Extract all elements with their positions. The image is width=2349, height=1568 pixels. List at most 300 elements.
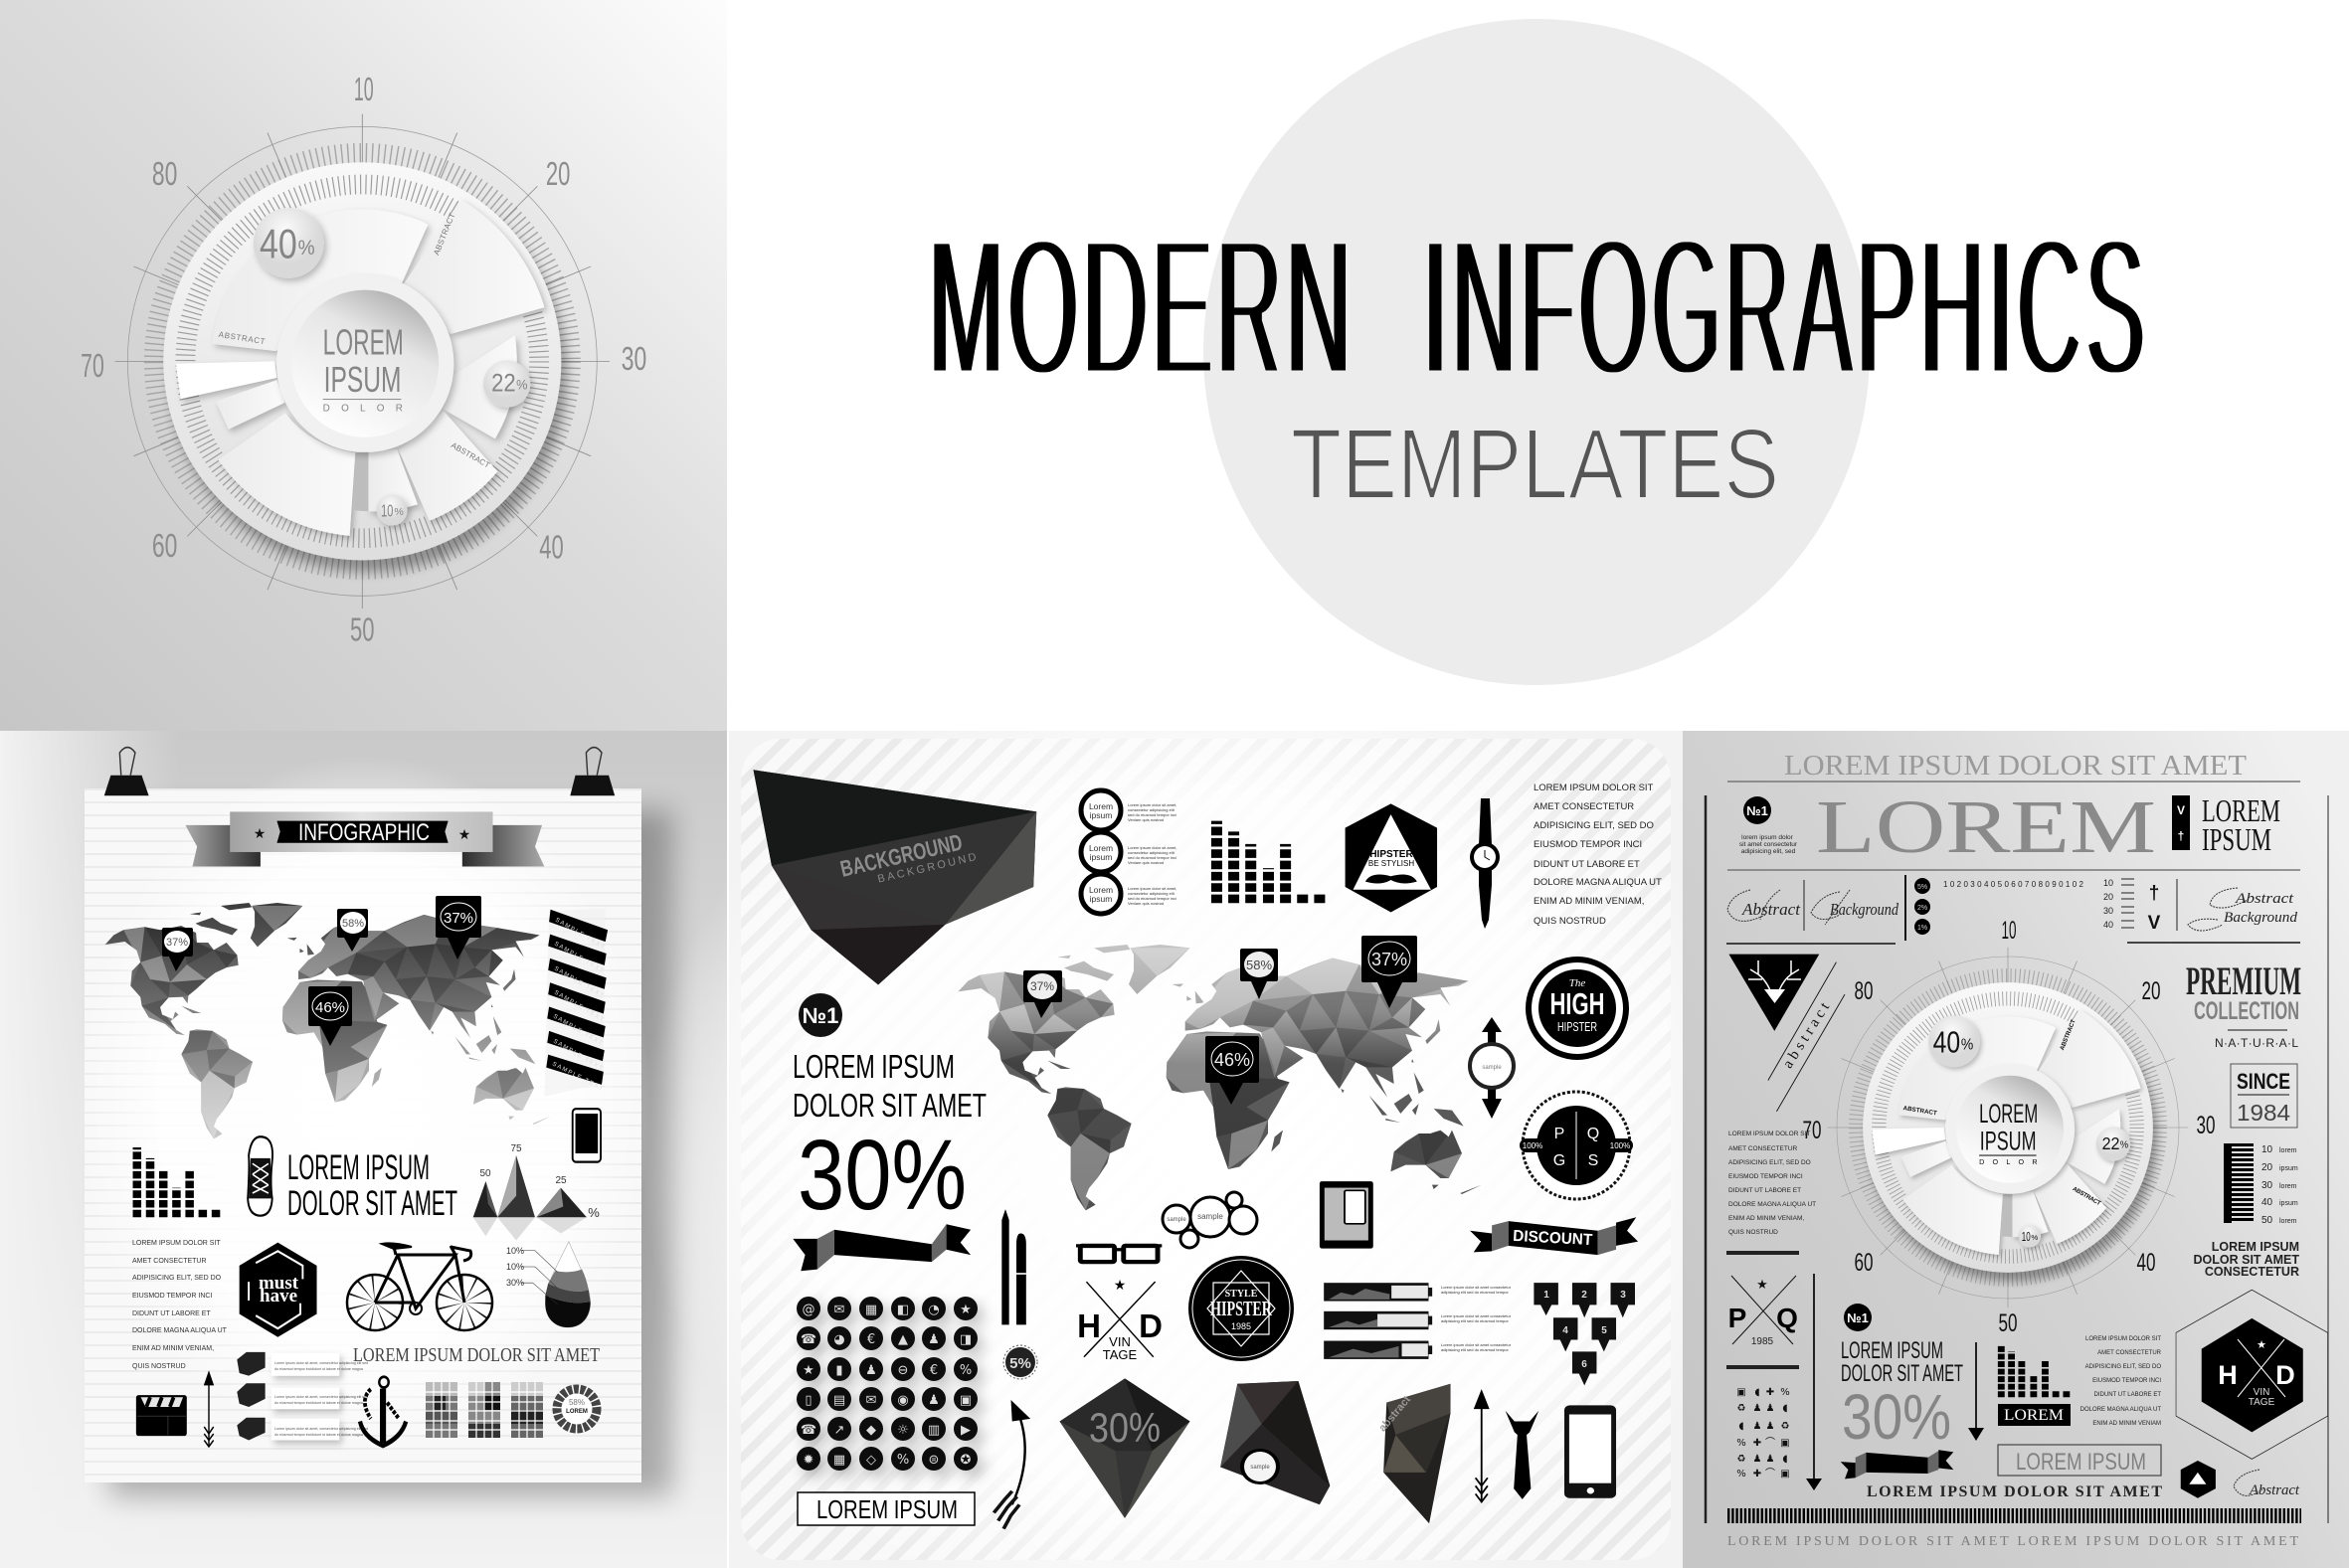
icon grid: ◉ xyxy=(897,1393,909,1408)
icon grid: ✉ xyxy=(834,1303,844,1317)
badge: PQGS: Q xyxy=(1587,1126,1599,1142)
premium collection: N·A·T·U·R·A·L xyxy=(2215,1036,2298,1050)
ribbon list: SAMPLE TEXT xyxy=(553,966,606,1000)
subheading: templates: TEMPLATES xyxy=(1291,409,1779,520)
dial scale numbers xyxy=(1802,917,2216,1337)
dial scale numbers: 70 xyxy=(1802,1117,1822,1144)
dial percentages: % xyxy=(298,235,315,260)
small icon grid: ✚ xyxy=(1753,1469,1761,1480)
dial percentages: % xyxy=(2120,1140,2128,1151)
logo: HD vintage: VIN xyxy=(1109,1334,1131,1349)
dial centre label xyxy=(1979,1099,2038,1166)
numbered pins: 2 xyxy=(1581,1290,1587,1301)
headline lorem ipsum: DOLOR SIT AMET xyxy=(287,1184,457,1223)
dial scale numbers: 60 xyxy=(152,527,177,564)
hexagon logo: HD vintage xyxy=(2176,1290,2328,1459)
icon grid: ▥ xyxy=(928,1423,940,1438)
ribbon: infographic xyxy=(185,811,544,867)
right aligned list: LOREM IPSUM DOLOR SIT xyxy=(2085,1336,2161,1342)
circle list: ipsum xyxy=(1090,894,1112,904)
circle list: Lorem ipsum dolor sit amet, xyxy=(1128,845,1176,850)
poster shadow xyxy=(109,810,672,1496)
badge: the high hipster: The xyxy=(1569,977,1585,989)
black tag with marks xyxy=(2172,795,2190,850)
dial percentages: % xyxy=(2031,1233,2039,1242)
icon grid: ✹ xyxy=(804,1453,814,1468)
bar chart xyxy=(2001,1345,2067,1397)
triangle chart: 75 xyxy=(510,1143,522,1154)
barcode legend xyxy=(2224,1143,2298,1226)
double arrow with dial xyxy=(1470,1017,1514,1119)
panel background xyxy=(729,731,1683,1568)
bubble cluster: sample xyxy=(1197,1212,1223,1221)
bar chart xyxy=(1216,821,1320,903)
small icon grid xyxy=(1736,1387,1790,1480)
dial abstract labels: ABSTRACT xyxy=(1902,1105,1937,1118)
label: lorem black xyxy=(1998,1404,2071,1426)
text list: ADIPISICING ELIT, SED DO xyxy=(1534,820,1654,831)
icon grid: ◔ xyxy=(928,1303,940,1317)
small icon grid: ▣ xyxy=(1780,1469,1790,1480)
speech tag list: do eiusmod tempor incididunt ut labore et dolore magna xyxy=(274,1401,363,1405)
icon grid: ◨ xyxy=(960,1332,972,1347)
marks: V xyxy=(2148,913,2161,934)
polygon banner: background xyxy=(754,770,1036,984)
circle list: Lorem xyxy=(1089,843,1113,853)
dial centre label: IPSUM xyxy=(324,359,401,400)
tablet icon xyxy=(1320,1181,1373,1249)
dial percentages xyxy=(260,221,528,521)
text list: QUIS NOSTRUD xyxy=(1728,1229,1778,1236)
icon grid: ★ xyxy=(803,1363,814,1378)
hexagon logo: HD vintage: TAGE xyxy=(2249,1397,2275,1408)
icon grid: % xyxy=(897,1453,909,1468)
ring gauge: 58% xyxy=(569,1398,585,1407)
icon grid: ♟ xyxy=(865,1363,877,1378)
logo: PQ 1985 xyxy=(1728,1276,1798,1347)
dial abstract labels: ABSTRACT xyxy=(2072,1185,2102,1207)
text list: ADIPISICING ELIT, SED DO xyxy=(1728,1159,1811,1166)
label box: lorem ipsum: LOREM IPSUM xyxy=(2016,1449,2146,1476)
circle list: sed do eiusmod tempor inci xyxy=(1128,896,1176,901)
text list: AMET CONSECTETUR xyxy=(132,1258,207,1265)
tick scale xyxy=(2103,878,2134,930)
pin 58 percent: 58% xyxy=(1246,958,1272,972)
barcode legend: lorem xyxy=(2279,1218,2297,1225)
gem: abstract xyxy=(1376,1384,1451,1523)
arrow icon xyxy=(1474,1389,1490,1502)
five percent circle xyxy=(1003,1345,1037,1379)
text list: AMET CONSECTETUR xyxy=(1534,801,1634,812)
poster centre glow xyxy=(75,756,651,1452)
text list xyxy=(1534,783,1662,927)
script: abstract background: Background xyxy=(1830,900,1898,919)
black tag with marks: V xyxy=(2177,803,2185,817)
curved arrow xyxy=(994,1400,1030,1529)
dial percentages: 22 xyxy=(2102,1133,2120,1153)
small icon grid: ♻ xyxy=(1737,1454,1746,1465)
heading: modern infographics: MODERN xyxy=(929,199,1355,416)
right aligned list xyxy=(2080,1336,2162,1427)
discount ribbon: DISCOUNT xyxy=(1513,1228,1593,1249)
dial percentages: 40 xyxy=(260,221,297,267)
text list: ADIPISICING ELIT, SED DO xyxy=(132,1275,222,1282)
ring gauge xyxy=(557,1389,597,1429)
dial scale numbers: 20 xyxy=(546,155,570,192)
text list: LOREM IPSUM DOLOR SIT xyxy=(1534,783,1654,793)
number one with blurb: №1 xyxy=(1746,803,1768,818)
small icon grid: ▣ xyxy=(1780,1438,1790,1449)
black ribbon xyxy=(1841,1450,1953,1479)
percent dots xyxy=(1914,878,1930,935)
icon grid: ▶ xyxy=(961,1423,971,1438)
circle list: Lorem ipsum dolor sit amet, xyxy=(1128,886,1176,891)
text list xyxy=(1728,1131,1816,1236)
bicycle icon xyxy=(347,1243,492,1330)
dial scale numbers: 40 xyxy=(2136,1249,2156,1277)
script: abstract background: Abstract xyxy=(1741,900,1801,919)
badge: must have xyxy=(240,1243,317,1337)
polygon banner: background: BACKGROUND xyxy=(837,828,965,882)
dial percentages xyxy=(1933,1026,2128,1244)
panel: title xyxy=(929,19,2149,685)
speech tag list xyxy=(237,1352,368,1440)
dial scale numbers: 80 xyxy=(1854,977,1874,1005)
text list: AMET CONSECTETUR xyxy=(1728,1145,1798,1152)
right aligned list: EIUSMOD TEMPOR INCI xyxy=(2092,1378,2161,1384)
circle list: sed do eiusmod tempor inci xyxy=(1128,855,1176,860)
dial centre label: LOREM xyxy=(1979,1099,2038,1129)
text list: LOREM IPSUM DOLOR SIT xyxy=(1728,1131,1810,1137)
dial abstract labels: ABSTRACT xyxy=(450,440,491,470)
map pins xyxy=(1023,936,1417,1105)
barcode legend: 20 xyxy=(2261,1162,2273,1173)
pin 37 percent: 37% xyxy=(166,937,188,949)
icon grid: % xyxy=(960,1363,972,1378)
rotated abstract label xyxy=(1768,962,1845,1112)
script: abstract: Abstract xyxy=(2249,1482,2300,1498)
tick scale: 10 xyxy=(2103,878,2113,888)
ribbon list: SAMPLE TEXT xyxy=(553,942,606,975)
pin 37 percent: 37% xyxy=(1030,979,1054,993)
badge: PQGS: 100% xyxy=(1523,1141,1542,1150)
black ribbon xyxy=(793,1224,971,1271)
sheet glow xyxy=(638,651,1772,1568)
right aligned list: DIDUNT UT LABORE ET xyxy=(2094,1392,2161,1398)
panel: poster mockup xyxy=(0,731,727,1568)
headline lorem ipsum: LOREM IPSUM xyxy=(1841,1337,1943,1364)
logo: HD vintage: H xyxy=(1077,1307,1101,1344)
logo: PQ 1985: ★ xyxy=(1756,1278,1768,1293)
small icon grid: % xyxy=(1780,1387,1790,1398)
icon grid: ☎ xyxy=(801,1423,816,1438)
text list: EIUSMOD TEMPOR INCI xyxy=(132,1293,212,1300)
polygon banner: background: BACKGROUND xyxy=(876,851,980,886)
serif lorem ipsum: LOREM xyxy=(2202,792,2280,828)
since 1984 stamp: 1984 xyxy=(2237,1100,2290,1126)
text list: ENIM AD MINIM VENIAM, xyxy=(1534,896,1644,907)
icon grid: ♟ xyxy=(928,1393,940,1408)
triangle chart: 25 xyxy=(555,1175,567,1186)
icon grid: ▯ xyxy=(805,1393,813,1408)
pin 46 percent xyxy=(308,986,352,1046)
number one circle xyxy=(1844,1304,1872,1331)
pin 37 percent xyxy=(1023,970,1062,1018)
poster sheet xyxy=(85,788,641,1482)
dial scale numbers xyxy=(81,71,646,648)
percent dots: 2% xyxy=(1917,905,1927,912)
pin 58 percent xyxy=(337,909,368,952)
small icon grid: % xyxy=(1736,1438,1746,1449)
pin 46 percent: 46% xyxy=(315,999,345,1016)
headline lorem ipsum xyxy=(793,1048,987,1124)
dial centre label: DOLOR xyxy=(323,403,403,414)
battery bars xyxy=(1324,1283,1512,1359)
triangle chart: 50 xyxy=(479,1168,491,1179)
world map xyxy=(958,945,1482,1210)
deer triangle xyxy=(1728,955,1819,1031)
tick scale: 20 xyxy=(2103,892,2113,902)
small icon grid: ♟ xyxy=(1753,1421,1761,1432)
droplet chart: 10% xyxy=(506,1246,524,1256)
small icon grid: ◖ xyxy=(1782,1454,1788,1465)
icon grid: ◕ xyxy=(833,1332,845,1347)
dial centre label: IPSUM xyxy=(1980,1126,2037,1155)
serif lorem ipsum xyxy=(2202,792,2280,857)
logo: HD vintage: D xyxy=(1139,1307,1163,1344)
percent dots: 1% xyxy=(1917,925,1927,932)
since 1984 stamp: SINCE xyxy=(2237,1069,2290,1094)
battery bars: Lorem ipsum dolor sit amet consectetur xyxy=(1441,1285,1512,1290)
speech tag list: do eiusmod tempor incididunt ut labore et dolore magna xyxy=(274,1433,363,1437)
dial scale numbers: 20 xyxy=(2142,977,2160,1005)
script: abstract background xyxy=(1727,880,1898,931)
binder clips xyxy=(104,748,615,795)
icon grid: ♟ xyxy=(928,1332,940,1347)
badge: hipster hexagon: HIPSTER xyxy=(1369,849,1413,860)
gem: sample text xyxy=(1220,1381,1330,1504)
dial scale numbers: 40 xyxy=(539,529,564,566)
dial abstract labels xyxy=(218,212,491,470)
icon grid: @ xyxy=(802,1303,815,1317)
pin 58 percent xyxy=(1240,949,1278,999)
script: abstract xyxy=(2234,1470,2300,1498)
icon grid: ☎ xyxy=(801,1332,816,1347)
percent dots: 5% xyxy=(1917,884,1927,891)
badge: PQGS: S xyxy=(1588,1152,1598,1169)
dial percentages: 10 xyxy=(381,501,393,521)
discount ribbon xyxy=(1470,1217,1638,1255)
double arrow with dial: sample xyxy=(1482,1065,1502,1071)
small icon grid: ▣ xyxy=(1736,1387,1746,1398)
text list: DOLORE MAGNA ALIQUA UT xyxy=(1728,1201,1816,1208)
headline lorem ipsum: LOREM IPSUM xyxy=(793,1048,955,1085)
dial scale numbers: 70 xyxy=(81,347,104,384)
ribbon list: SAMPLE TEXT xyxy=(553,990,606,1024)
label: lorem black: LOREM xyxy=(2004,1407,2064,1424)
panel background xyxy=(0,731,727,1568)
circle list: sed do eiusmod tempor inci xyxy=(1128,812,1176,817)
divider bar xyxy=(1904,875,1906,941)
icon grid: ☼ xyxy=(897,1423,909,1438)
dial centre label: DOLOR xyxy=(1979,1157,2038,1166)
number one with blurb: sit amet consectetur xyxy=(1739,841,1798,848)
speech tag list: do eiusmod tempor incididunt ut labore et dolore magna xyxy=(274,1367,363,1371)
panel background xyxy=(0,0,727,731)
badge: style hipster: 1985 xyxy=(1231,1321,1251,1331)
pin 37 percent large xyxy=(436,896,481,959)
bubble cluster: sample xyxy=(1167,1217,1186,1223)
sneaker icon xyxy=(248,1136,272,1216)
small icon grid: ♻ xyxy=(1781,1421,1790,1432)
battery bars: Lorem ipsum dolor sit amet consectetur xyxy=(1441,1342,1512,1347)
numbered pins: 4 xyxy=(1562,1325,1568,1336)
number one circle: №1 xyxy=(803,1003,838,1028)
text list: DOLORE MAGNA ALIQUA UT xyxy=(132,1327,228,1334)
dial abstract labels: ABSTRACT xyxy=(2059,1018,2078,1051)
arrow icon xyxy=(204,1370,214,1447)
number one circle: №1 xyxy=(1847,1310,1869,1325)
badge: the high hipster: HIPSTER xyxy=(1557,1019,1597,1034)
dial scale numbers: 50 xyxy=(1999,1309,2017,1337)
dial scale numbers: 60 xyxy=(1854,1249,1874,1277)
numbered pins: 6 xyxy=(1581,1359,1587,1370)
smartphone icon xyxy=(573,1109,601,1162)
header text: LOREM IPSUM DOLOR SIT AMET xyxy=(1784,751,2247,782)
number one with blurb: adipisicing elit, sed xyxy=(1741,848,1796,855)
text list: ENIM AD MINIM VENIAM, xyxy=(1728,1215,1804,1222)
serif headline: LOREM IPSUM DOLOR SIT AMET xyxy=(353,1344,600,1366)
dial percentages: 10 xyxy=(2022,1229,2031,1244)
circle list: consectetur adipisicing elit xyxy=(1128,807,1175,812)
logo: PQ 1985: Q xyxy=(1776,1303,1798,1333)
dial percentages: 40 xyxy=(1933,1026,1960,1059)
pin 37 percent large: 37% xyxy=(444,910,473,927)
badge: PQGS: G xyxy=(1553,1152,1565,1169)
right caption: DOLOR SIT AMET xyxy=(2194,1253,2299,1267)
icon grid: € xyxy=(930,1363,938,1378)
circle list: Veniam quis nostrud xyxy=(1128,860,1164,865)
small icon grid: ♟ xyxy=(1766,1454,1774,1465)
right aligned list: ENIM AD MINIM VENIAM xyxy=(2092,1421,2161,1427)
big percentage: 30% xyxy=(798,1120,967,1231)
pin 37 percent large: 37% xyxy=(1371,950,1407,969)
label box: lorem ipsum: LOREM IPSUM xyxy=(816,1494,958,1524)
script: abstract background right: Abstract xyxy=(2235,891,2294,907)
tick scale: 30 xyxy=(2103,906,2113,916)
dial abstract labels xyxy=(1902,1018,2102,1207)
glasses icon xyxy=(1076,1246,1162,1262)
badge: PQGS xyxy=(1520,1092,1633,1199)
badge: style hipster xyxy=(1188,1256,1294,1361)
tick scale: 40 xyxy=(2103,920,2113,930)
numbered pins xyxy=(1534,1283,1635,1385)
small hexagon triangle badge xyxy=(2181,1461,2216,1498)
dial centre label: LOREM xyxy=(323,321,404,362)
small icon grid: ⌒ xyxy=(1765,1468,1775,1480)
triangle chart: % xyxy=(588,1205,600,1220)
icon grid: ⊖ xyxy=(898,1363,908,1378)
serif line: LOREM IPSUM DOLOR SIT AMET xyxy=(1867,1483,2162,1500)
clapperboard icon xyxy=(136,1395,187,1436)
striped sheet xyxy=(741,739,1671,1560)
watch icon xyxy=(1470,798,1500,929)
icon grid xyxy=(797,1297,978,1471)
small icon grid: ♟ xyxy=(1753,1454,1761,1465)
logo: PQ 1985: P xyxy=(1728,1303,1746,1333)
gem: 30 percent: 30% xyxy=(1089,1404,1161,1451)
ribbon list: SAMPLE TEXT xyxy=(554,918,607,952)
numbered pins: 5 xyxy=(1601,1325,1607,1336)
circle list: Veniam quis nostrud xyxy=(1128,817,1164,822)
dial percentages: 22 xyxy=(491,371,516,398)
icon grid: ▤ xyxy=(833,1393,845,1408)
ring gauge: LOREM xyxy=(566,1409,588,1415)
small icon grid: ♟ xyxy=(1766,1403,1774,1414)
script: abstract background right xyxy=(2177,879,2298,931)
text list xyxy=(132,1240,228,1370)
badge: style hipster: HIPSTER xyxy=(1210,1297,1273,1320)
barcode legend: 50 xyxy=(2261,1215,2273,1226)
dial percentages: % xyxy=(394,507,404,518)
five percent circle: 5% xyxy=(1009,1355,1031,1372)
battery bars: Lorem ipsum dolor sit amet consectetur xyxy=(1441,1313,1512,1318)
ribbon: infographic: ★ xyxy=(254,826,266,842)
dial scale numbers: 30 xyxy=(2196,1112,2216,1139)
headline lorem ipsum: DOLOR SIT AMET xyxy=(1841,1360,1963,1387)
dial centre label xyxy=(323,321,404,414)
circle list: consectetur adipisicing elit xyxy=(1128,850,1175,855)
circle list: ipsum xyxy=(1090,852,1112,862)
dial scale numbers: 50 xyxy=(350,611,375,648)
text list: QUIS NOSTRUD xyxy=(132,1363,186,1370)
text list: EIUSMOD TEMPOR INCI xyxy=(1728,1173,1803,1180)
battery bars: adipisicing elit sed do eiusmod tempor xyxy=(1441,1290,1509,1295)
arrow down long xyxy=(1806,1274,1822,1490)
dial scale numbers: 10 xyxy=(354,71,374,107)
panel: paper dial chart xyxy=(0,0,727,731)
right aligned list: AMET CONSECTETUR xyxy=(2097,1350,2162,1356)
icon grid: ◧ xyxy=(897,1303,909,1317)
bar chart xyxy=(137,1147,216,1217)
circle list: Veniam quis nostrud xyxy=(1128,901,1164,906)
number scale: 102030405060708090102 xyxy=(1943,880,2084,889)
number one with blurb xyxy=(1739,796,1798,855)
right caption xyxy=(2194,1240,2299,1279)
panel: typographic poster xyxy=(1683,731,2349,1568)
pin 37 percent xyxy=(162,928,193,971)
droplet chart: 30% xyxy=(506,1278,524,1288)
hexagon logo: HD vintage: VIN xyxy=(2254,1387,2269,1398)
tie icon xyxy=(1506,1411,1538,1499)
gem: abstract: abstract xyxy=(1376,1394,1413,1434)
dial scale numbers: 30 xyxy=(622,340,646,377)
circle list: Lorem xyxy=(1089,885,1113,895)
dial scale numbers: 10 xyxy=(2001,917,2017,945)
barcode legend: ipsum xyxy=(2279,1165,2298,1172)
circle list: consectetur adipisicing elit xyxy=(1128,891,1175,896)
small icon grid: ♟ xyxy=(1766,1421,1774,1432)
icon grid: ✉ xyxy=(866,1393,876,1408)
barcode strip xyxy=(1727,1508,2301,1523)
barcode legend: 40 xyxy=(2261,1197,2273,1208)
footer text: LOREM IPSUM DOLOR SIT AMET LOREM IPSUM DOLOR SIT AMET xyxy=(1727,1534,2298,1549)
numbered pins: 1 xyxy=(1543,1290,1549,1301)
big serif word: LOREM xyxy=(1816,785,2156,869)
gem: sample text: sample xyxy=(1250,1465,1270,1471)
right aligned list: ADIPISICING ELIT, SED DO xyxy=(2085,1364,2161,1370)
right caption: CONSECTETUR xyxy=(2205,1265,2299,1279)
